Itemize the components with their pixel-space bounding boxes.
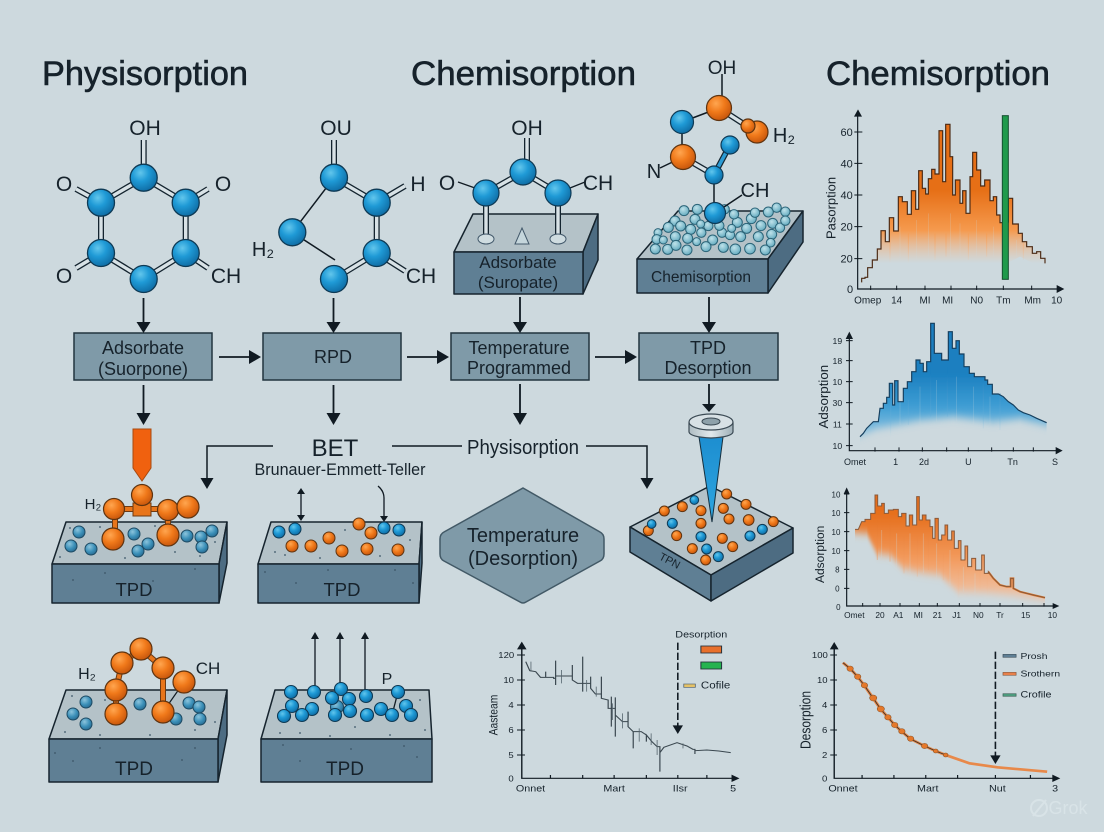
slab 3: orange chain on TPD surface [49,638,227,782]
slab with chemisorption molecule: OH [708,58,736,79]
chart: blue histogram: Omet [844,457,866,467]
molecule: hexagonal ring 1: O [56,265,72,288]
chart: orange histogram top right: 40 [841,158,853,170]
flow box: Adsorbate (Suorpone): Adsorbate [102,338,184,358]
chart: smooth desorption curve: 3 [1052,784,1059,794]
chart: smooth desorption curve: Crofile [1020,690,1052,700]
flow box: Adsorbate (Suorpone): (Suorpone) [98,359,188,379]
slab with adsorbate molecule: (Suropate) [478,273,558,292]
chart: noisy desorption line: Onnet [516,784,545,794]
chart: blue histogram: 19 [833,336,842,346]
chart: orange declining histogram: 10 [832,528,841,537]
slab with adsorbate molecule [439,117,613,294]
chart: orange histogram top right: Pasorption [823,177,838,239]
chart: orange declining histogram: 0 [836,603,841,612]
chart: orange histogram top right: Mm [1024,296,1041,307]
chart: noisy desorption line: 6 [508,726,514,735]
title: Chemisorption right: Chemisorption [826,55,1050,93]
chart: orange histogram top right: 14 [891,296,903,307]
chart: orange declining histogram: A1 [893,610,904,620]
chart: blue histogram: 2d [919,457,929,467]
chart: orange declining histogram: MI [914,610,923,620]
chart: blue histogram: 10 [833,377,842,387]
surface particles [643,489,778,565]
slab with adsorbate molecule: CH [583,172,613,195]
chart: orange histogram top right: 40 [841,190,853,202]
molecule: hexagonal ring 1: CH [211,265,241,288]
slab with chemisorption molecule: CH [741,180,769,202]
chart: noisy desorption line [488,630,739,794]
hexagon: Temperature (Desorption): (Desorption) [468,548,578,570]
molecule: open ring 2: H [410,173,426,196]
flow box: TPD Desorption [639,333,778,380]
slab 4: blue clusters on TPD surface [261,632,432,782]
chart: smooth desorption curve: 0 [822,774,827,783]
connector arrows from BET and Physisorption [200,446,654,489]
molecule: open ring 2: OU [320,117,352,140]
slab 1: orange molecule on TPD surface [52,484,227,603]
slab with adsorbate molecule: O [439,172,455,195]
chart: blue histogram: 11 [833,419,842,429]
chart: orange histogram top right: 60 [841,127,853,139]
label: Brunauer-Emmett-Teller: Brunauer-Emmett-Teller [254,460,426,479]
chart: orange histogram top right: Tm [996,296,1011,307]
slab 4: blue clusters on TPD surface: TPD [326,759,364,780]
chart: orange declining histogram: J1 [952,610,961,620]
flow box: Temperature Programmed: Temperature [468,338,570,358]
chart: orange declining histogram: 10 [832,547,841,556]
chart: orange histogram top right [823,109,1064,307]
chart: noisy desorption line: 5 [508,751,514,760]
chart: blue histogram: 18 [833,356,842,366]
icon: blue cone [699,437,723,522]
flow box: Adsorbate (Suorpone) [74,333,212,380]
title: Chemisorption centre: Chemisorption [411,55,636,93]
hexagon: Temperature (Desorption) [440,488,604,603]
slab with adsorbate molecule: Adsorbate [479,253,557,272]
chart: smooth desorption curve: 4 [822,701,827,710]
chart: blue histogram [818,322,1063,465]
chart: orange declining histogram: 21 [933,610,942,620]
flow box: Temperature Programmed: Programmed [467,358,571,378]
chart: orange declining histogram: 20 [875,610,885,620]
molecule: open ring 2: CH [406,265,436,288]
chart: orange declining histogram: N0 [973,610,984,620]
chart: smooth desorption curve: Onnet [828,784,858,794]
isometric surface with probe [630,414,793,601]
chart: orange histogram top right: 20 [841,222,853,234]
chart: smooth desorption curve [797,642,1060,794]
chart: blue histogram: Tn [1007,457,1018,467]
slab with chemisorption molecule: H₂ [773,125,795,147]
molecule: hexagonal ring 1: O [215,173,231,196]
chart: orange histogram top right: 20 [841,254,853,266]
slab 2: mixed adsorbates on TPD surface [258,486,422,603]
chart: noisy desorption line: Aasteam [488,695,501,735]
chart: noisy desorption line: 120 [498,651,514,660]
slab with chemisorption molecule: Chemisorption [651,269,751,286]
label: BET: BET [312,435,359,462]
chart: noisy desorption line: 4 [508,701,514,710]
chart: smooth desorption curve: 10 [817,676,828,685]
chart: orange histogram top right: 10 [1051,296,1063,307]
slab 1: orange molecule on TPD surface: H₂ [85,496,102,513]
watermark: Grok [1031,798,1088,818]
chart: orange declining histogram: Omet [844,610,865,620]
chart: orange declining histogram: 8 [835,566,840,575]
flow box: TPD Desorption: TPD [690,338,726,358]
slab with chemisorption molecule [637,58,803,293]
flow box: RPD: RPD [314,347,352,367]
chart: orange declining histogram: 10 [832,509,841,518]
flow box: TPD Desorption: Desorption [664,358,752,378]
molecule: hexagonal ring 1: O [56,173,72,196]
slab 4: blue clusters on TPD surface: P [382,671,392,688]
chart: smooth desorption curve: 100 [812,651,828,660]
chart: orange declining histogram: 0 [835,585,840,594]
watermark: Grok: Grok [1048,798,1088,818]
chart: orange histogram top right: Omep [854,296,882,307]
chart: smooth desorption curve: Nut [989,784,1006,794]
chart: orange declining histogram: 15 [1021,610,1031,620]
slab 3: orange chain on TPD surface: H₂ [78,666,96,683]
flow box: RPD [263,333,401,380]
chart: orange histogram top right: 0 [847,284,853,296]
chart: blue histogram: 30 [833,398,842,408]
chart: smooth desorption curve: 6 [822,726,827,735]
slab 1: orange molecule on TPD surface: TPD [116,579,152,600]
title: Physisorption: Physisorption [42,55,248,93]
chart: smooth desorption curve: 2 [822,751,827,760]
slab with chemisorption molecule: N [647,161,661,183]
chart: orange declining histogram: Tr [996,610,1004,620]
molecule: open ring 2 [252,117,436,292]
chart: blue histogram: Adsorption [816,365,831,429]
chart: blue histogram: S [1052,457,1058,467]
chart: orange declining histogram [815,488,1060,618]
molecule: hexagonal ring 1 [56,117,241,292]
chart: orange histogram top right: MI [919,296,931,307]
flow box: Temperature Programmed [451,333,589,380]
slab 3: orange chain on TPD surface: TPD [115,759,153,780]
slab 3: orange chain on TPD surface: CH [196,659,220,678]
chart: blue histogram: U [965,457,972,467]
chart: smooth desorption curve: Prosh [1020,652,1047,662]
chart: blue histogram: 1 [893,457,898,467]
chart: noisy desorption line: 10 [503,676,514,685]
chart: noisy desorption line: IIsr [673,784,688,794]
chart: orange histogram top right: MI [942,296,953,307]
flow arrows [136,297,716,425]
label: Physisorption: Physisorption [467,437,579,459]
chart: noisy desorption line: 5 [730,784,737,794]
chart: smooth desorption curve: Srothern [1020,669,1060,679]
isometric surface with probe: TPN [657,551,682,572]
small surface particles [650,203,790,255]
icon: orange pointer arrow [133,429,151,481]
chart: noisy desorption line: Desorption [675,630,727,640]
chart: blue histogram: 10 [833,441,842,451]
chart: orange histogram top right: N0 [970,296,983,307]
molecule: open ring 2: H₂ [252,239,274,261]
chart: smooth desorption curve: Mart [917,784,939,794]
molecule: hexagonal ring 1: OH [129,117,161,140]
chart: noisy desorption line: 0 [508,774,514,783]
chart: orange declining histogram: 10 [832,490,841,499]
hexagon: Temperature (Desorption): Temperature [467,525,579,547]
icon: probe nozzle [689,414,733,438]
chart: noisy desorption line: Cofile [701,680,730,691]
chart: noisy desorption line: Mart [603,784,625,794]
chart: orange declining histogram: Adsorption [813,526,827,583]
slab with adsorbate molecule: OH [511,117,543,140]
chart: orange declining histogram: 10 [1048,610,1057,620]
slab 2: mixed adsorbates on TPD surface: TPD [324,579,360,600]
chart: smooth desorption curve: Desorption [797,691,814,749]
